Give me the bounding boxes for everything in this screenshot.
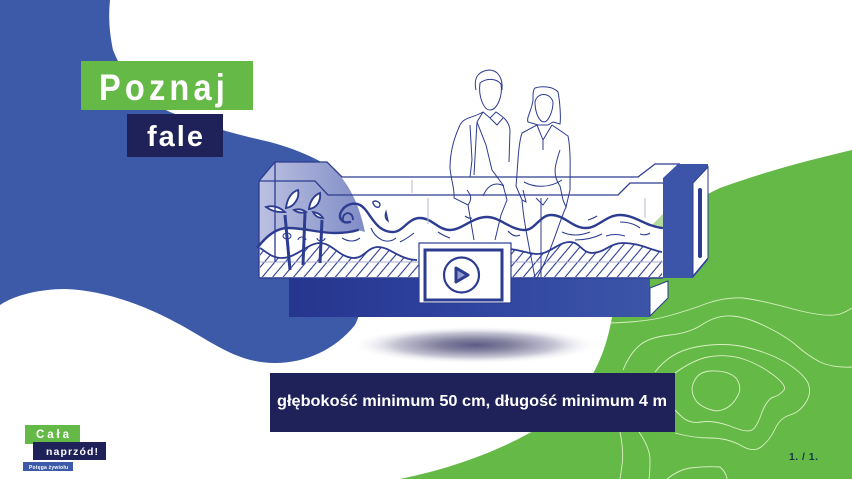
caption: dimensions: głębokość minimum 50 cm, długość minimum 4 m — [277, 393, 667, 410]
tank glass outline — [259, 162, 680, 278]
subtitle: fale — [127, 114, 223, 157]
caption: dimensions — [270, 373, 675, 432]
man figure — [450, 70, 510, 240]
background: blue blob — [0, 0, 368, 363]
woman figure — [516, 87, 570, 278]
tank base — [289, 278, 668, 317]
upper wave line — [258, 204, 662, 247]
kelp plants — [266, 190, 323, 270]
right end block — [663, 164, 708, 278]
pale green through glass — [652, 214, 663, 229]
illustration: wave tank with visitors — [258, 70, 708, 317]
shadow under tank — [351, 326, 599, 364]
subtitle: fale: fale — [147, 121, 203, 153]
background: green field with contour lines — [400, 150, 852, 479]
lower wave line — [260, 242, 662, 260]
logo: Potęga żywiołu — [29, 465, 68, 471]
logo: naprzód! — [46, 446, 98, 458]
title: Poznaj — [81, 61, 253, 110]
tank interior — [259, 162, 663, 278]
video screen icon — [419, 243, 511, 303]
sand hatching — [260, 242, 662, 277]
glass tinted end — [259, 162, 365, 247]
title: Poznaj: Poznaj — [99, 67, 225, 108]
logo: Cała — [36, 429, 70, 441]
wave curl — [343, 213, 353, 221]
logo — [23, 425, 106, 471]
water ripples and droplets — [283, 201, 650, 242]
page number: 1. / 1. — [789, 451, 818, 463]
